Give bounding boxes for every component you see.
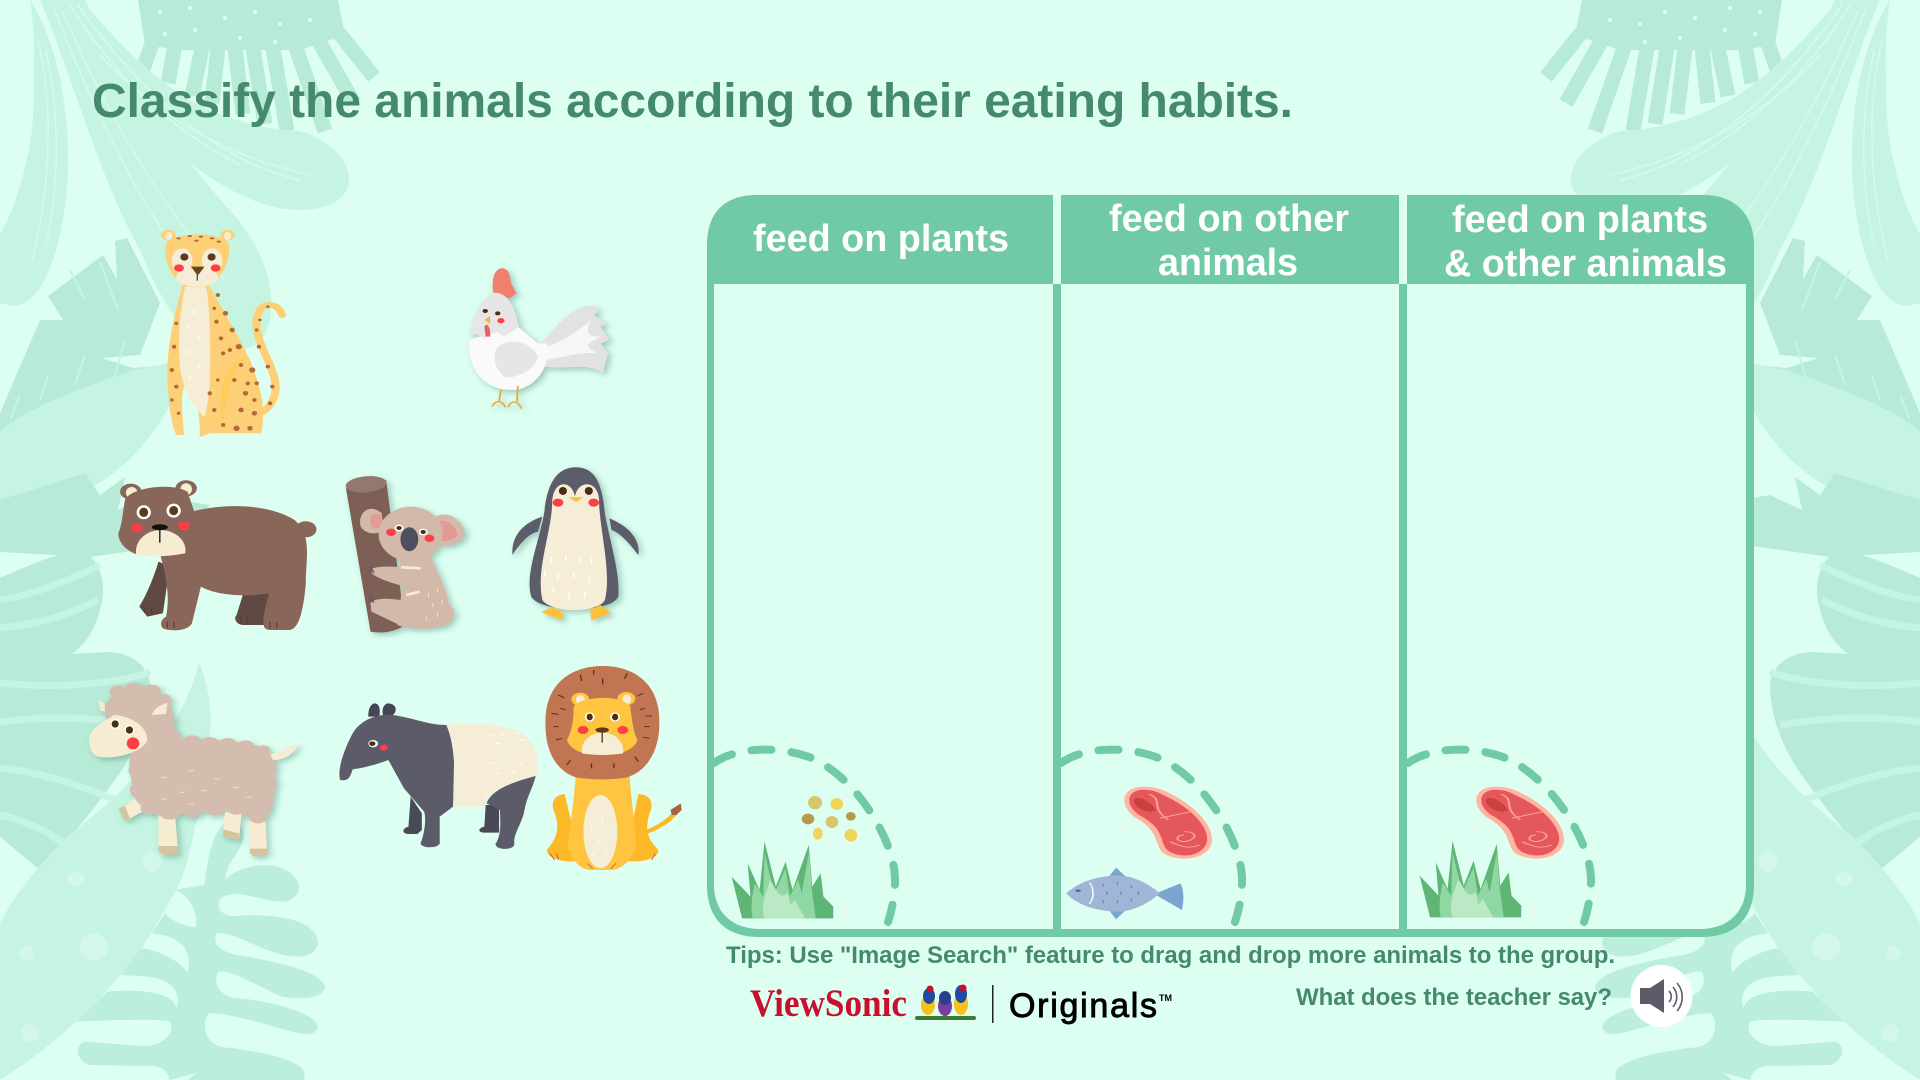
table interior [714, 284, 1746, 929]
icon: grass column 1 [732, 842, 833, 918]
icon: leopard [161, 230, 282, 437]
icon: sheep [89, 683, 298, 857]
dashed arc column 1 [714, 750, 895, 922]
icon: tapir [339, 703, 538, 849]
ViewSonic wordmark: ViewSonic [750, 982, 907, 1025]
animals upper rows [118, 230, 639, 632]
icon: grass column 3 [1420, 841, 1521, 917]
icon: penguin [512, 467, 639, 621]
table frame [707, 195, 1754, 937]
header: feed on plants and other animals: & other animals [1444, 243, 1727, 285]
header: feed on other animals: feed on other [1109, 198, 1349, 240]
tips text: Tips: Use "Image Search" feature to drag and drop more animals to the group. [726, 942, 1615, 969]
Originals wordmark: Originals [1009, 987, 1157, 1025]
trademark: TM [1159, 993, 1172, 1003]
icon: three birds [915, 984, 976, 1020]
icon: meat column 2 [1124, 787, 1212, 859]
icon: fish column 2 [1066, 868, 1183, 919]
icon: bear [118, 480, 316, 630]
teacher prompt: What does the teacher say? [1296, 984, 1612, 1011]
animals lower row [89, 666, 682, 870]
dashed arc column 2 [1061, 750, 1242, 922]
right jungle foliage [1546, 0, 1920, 1080]
logo: ViewSonic Originals [750, 982, 1172, 1025]
logo divider [992, 985, 994, 1023]
icon: meat column 3 [1476, 787, 1564, 859]
header: feed on plants and other animals: feed on plants [1452, 199, 1708, 241]
icon: seeds column 1 [802, 796, 857, 842]
dashed arc column 3 [1408, 750, 1591, 922]
left jungle foliage [0, 0, 374, 1080]
header: feed on plants: feed on plants [753, 218, 1009, 260]
column dividers [1053, 284, 1407, 934]
header gaps [1053, 195, 1407, 284]
icon: koala [344, 474, 465, 632]
header: feed on other animals [1109, 198, 1349, 284]
header: feed on plants and other animals [1444, 199, 1727, 285]
icon: lion [545, 666, 682, 870]
header: feed on other animals: animals [1158, 242, 1298, 284]
food icons [732, 787, 1564, 919]
title: Classify the animals according to their eating habits. [92, 75, 1293, 128]
icon: speaker button [1630, 965, 1692, 1027]
icon: rooster [469, 268, 609, 409]
classification table [707, 195, 1754, 937]
